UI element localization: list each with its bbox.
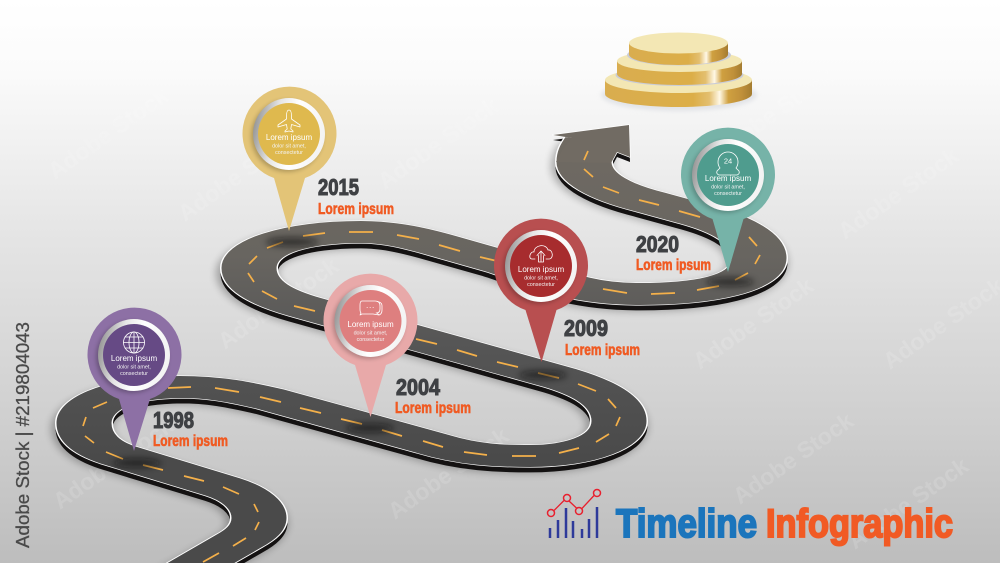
pin text: consectetur (527, 282, 555, 288)
icon: chat bubbles (360, 301, 382, 315)
title: Timeline (616, 502, 757, 546)
watermarks: Adobe Stock (728, 407, 858, 509)
pin text: dolor sit amet, (354, 330, 388, 336)
podium ground shadow (601, 79, 757, 111)
title: Infographic (766, 502, 953, 546)
pin text (518, 265, 564, 288)
road centre dashes (83, 151, 760, 562)
pin text: Lorem ipsum (347, 320, 394, 329)
pin text: dolor sit amet, (117, 364, 151, 370)
watermarks: Adobe Stock (383, 422, 513, 524)
pin body (243, 87, 336, 231)
pin: 2004 (324, 274, 418, 432)
pin badge (332, 285, 406, 359)
pin badge (251, 98, 325, 172)
pin text: Lorem ipsum (518, 265, 564, 274)
pin shadow on road (266, 238, 318, 246)
pin badge (96, 319, 170, 393)
pin text: consectetur (275, 150, 303, 156)
label: 1998: Lorem ipsum (153, 433, 228, 450)
stock id side text: Adobe Stock | #219804043 (13, 322, 33, 548)
podium (601, 32, 757, 111)
label: 2009 (564, 315, 640, 359)
watermarks: Adobe Stock (833, 142, 963, 244)
pin text (347, 320, 394, 343)
watermarks: Adobe Stock (48, 412, 178, 514)
watermarks: Adobe Stock (688, 272, 818, 374)
road surface (84, 125, 759, 563)
road shadow (82, 145, 757, 563)
pin shadow on road (706, 278, 754, 286)
label: 2004: Lorem ipsum (395, 400, 471, 417)
watermarks: Adobe Stock (373, 92, 503, 194)
pin: 2020 (681, 128, 775, 286)
road white edge (84, 125, 759, 563)
label: 2015: 2015 (318, 174, 359, 200)
pin body (87, 308, 181, 451)
pin: 2015 (243, 87, 336, 246)
title (616, 502, 953, 546)
pin text (266, 133, 312, 156)
pin text: dolor sit amet, (524, 276, 558, 282)
watermarks: Adobe Stock (43, 82, 173, 184)
pin body (681, 128, 775, 272)
pin text: consectetur (120, 371, 148, 377)
pin badge (690, 139, 764, 213)
pin: 2009 (494, 219, 588, 380)
top tier (627, 32, 731, 66)
label: 1998: 1998 (153, 407, 194, 433)
watermarks: Adobe Stock (708, 62, 838, 164)
pin badge (503, 230, 577, 304)
label: 2015 (318, 174, 394, 218)
winding road (82, 125, 760, 563)
watermarks: Adobe Stock (213, 252, 343, 354)
pin text: Lorem ipsum (705, 174, 751, 183)
pin body (494, 219, 588, 362)
label: 2015: Lorem ipsum (318, 201, 394, 218)
label: 2020: 2020 (636, 231, 679, 257)
pin shadow on road (519, 370, 567, 380)
pin text (111, 354, 157, 377)
label: 2020: Lorem ipsum (636, 257, 711, 274)
label: 2020 (636, 231, 711, 274)
middle tier (616, 50, 744, 86)
pin text: consectetur (714, 191, 742, 197)
icon: airplane (278, 110, 300, 132)
pin text: dolor sit amet, (711, 184, 745, 190)
pin text: dolor sit amet, (272, 144, 306, 150)
label: 2004 (395, 374, 471, 417)
label: 2009: 2009 (564, 315, 608, 341)
pin text: consectetur (357, 337, 385, 343)
label: 2009: Lorem ipsum (565, 342, 640, 359)
label: 2004: 2004 (396, 374, 440, 400)
icon: cloud upload (530, 246, 552, 262)
pin text (705, 174, 751, 197)
icon: globe (124, 332, 144, 353)
icon: 24 hour support: 24 (724, 156, 732, 166)
label: 1998 (153, 407, 228, 450)
pin body (324, 274, 418, 417)
watermarks: Adobe Stock (173, 124, 303, 226)
pin shadow on road (346, 424, 394, 432)
pin: 1998 (87, 308, 181, 468)
bottom tier (605, 67, 752, 107)
watermarks: Adobe Stock (843, 452, 973, 554)
pin text: Lorem ipsum (266, 133, 312, 142)
pin shadow on road (113, 458, 161, 468)
road side thickness (84, 130, 759, 563)
pin text: Lorem ipsum (111, 354, 157, 363)
icon: chart logo (548, 490, 600, 538)
